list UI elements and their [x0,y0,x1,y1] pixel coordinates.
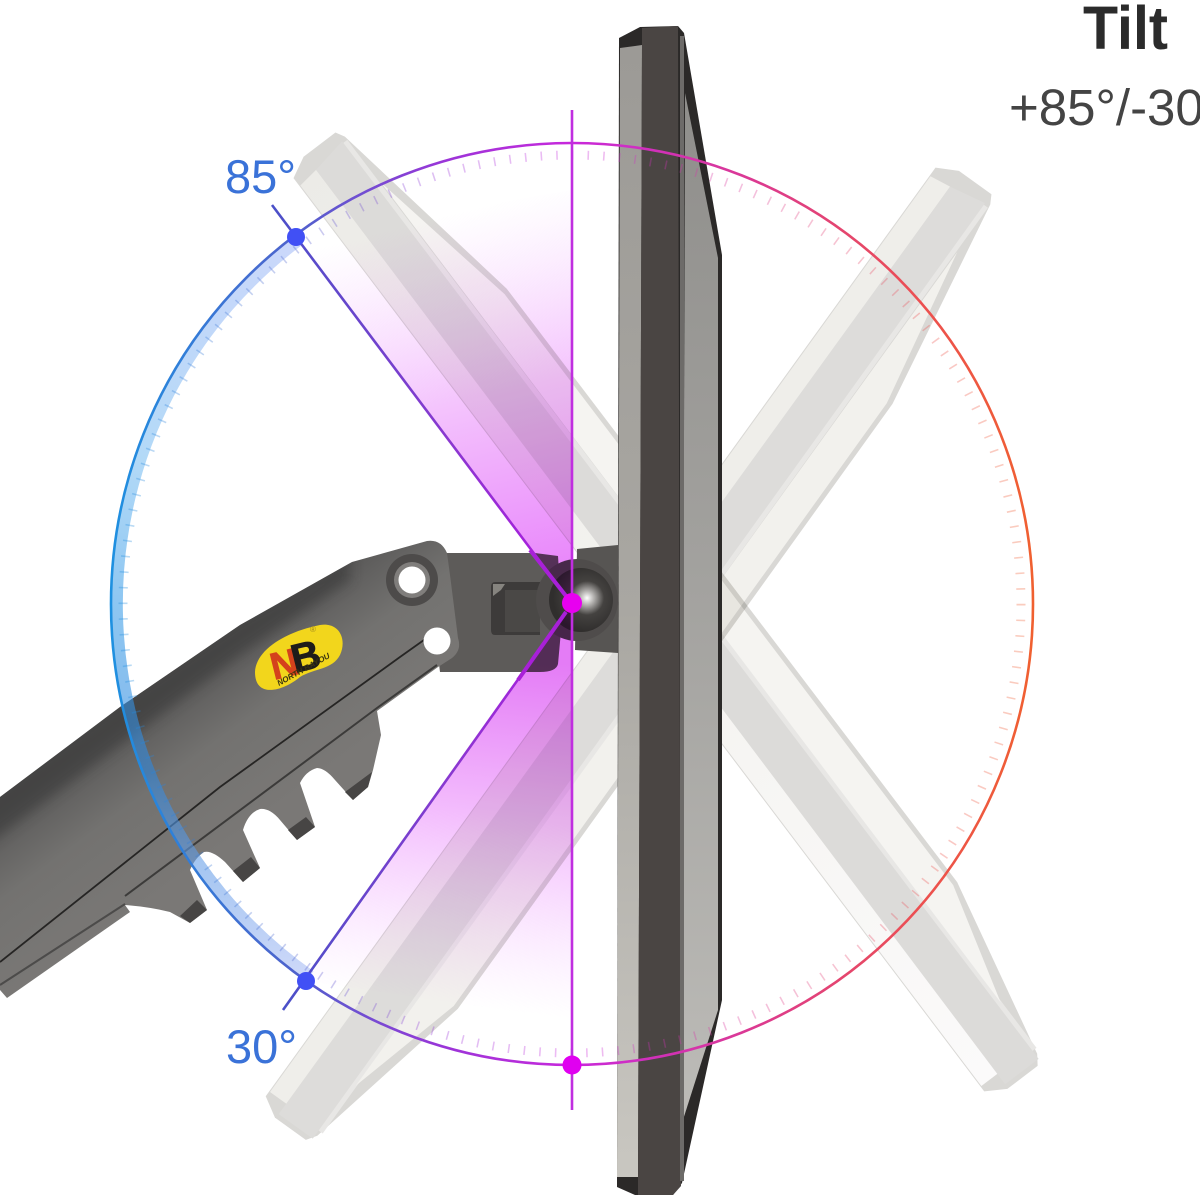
ball joint [536,559,618,641]
ghost monitor: tilted forward 30 degrees [259,157,1026,1167]
tilt wedge: lower [306,604,572,1020]
arm adjustment hole [424,628,450,654]
lower purple line near pivot [518,612,566,680]
ghost monitor: tilted back 85 degrees [285,107,1075,1101]
arc outline [111,143,1033,1065]
monitor thin strip [680,36,684,1181]
85 degree dot [287,228,305,246]
clevis slot [491,582,540,635]
upper purple line near pivot [530,550,566,596]
85 degree line [272,205,566,596]
30 degree line [283,612,566,1010]
monitor arm [0,541,618,998]
pivot centre dot [562,593,582,613]
pivot ring and hole [386,554,438,606]
monitor bracket [575,545,618,653]
30 degree dot [297,972,315,990]
brand logo: N [266,641,303,689]
arm body [0,541,459,998]
tilt wedge: upper [296,190,572,604]
brand logo: ® [310,625,316,634]
monitor back panel [682,93,718,1123]
angle protractor [111,143,1033,1065]
label: 30 degrees: 30° [226,1020,297,1073]
vertical reference line [571,110,573,1110]
brand logo [255,625,343,690]
tooth shadows [180,772,372,923]
brand logo: B [287,632,325,682]
tick marks [123,155,1021,1053]
label: 85 degrees: 85° [225,150,296,203]
arm groove lines [0,630,438,985]
arm upper dark band [0,556,350,850]
main monitor side view [617,26,722,1195]
monitor front face [617,45,642,1177]
monitor dark band [638,26,681,1195]
monitor back edge [617,26,722,1195]
brand logo: NORTH BAYOU [276,651,332,688]
arm clevis joint [436,553,562,672]
blue range band [117,240,310,976]
vertical line bottom dot [562,1056,582,1074]
